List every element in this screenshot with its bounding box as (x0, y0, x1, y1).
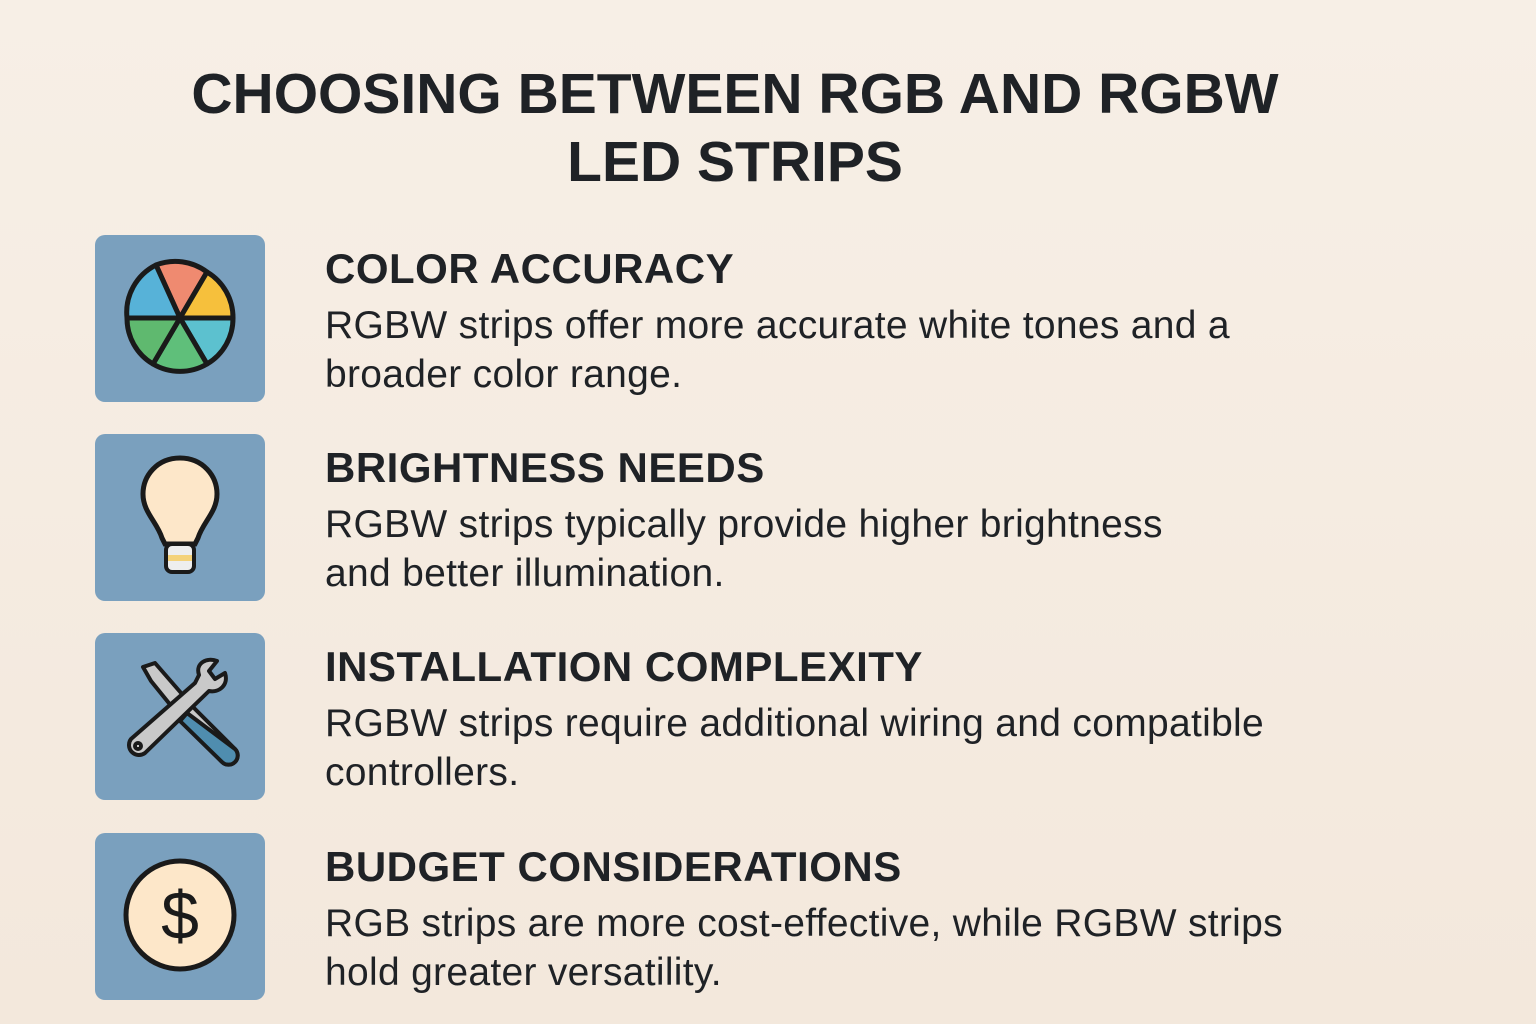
text (325, 304, 1230, 396)
icon: tools (95, 633, 265, 800)
text: RGBW strips offer more accurate white tones and a (325, 304, 1230, 347)
heading: COLOR ACCURACY (325, 245, 734, 292)
text (325, 503, 1163, 595)
heading: BUDGET CONSIDERATIONS (325, 843, 902, 890)
text: RGBW strips require additional wiring and compatible (325, 702, 1264, 745)
icon: light bulb (95, 434, 265, 601)
text (325, 702, 1264, 794)
panel: installation (95, 633, 1264, 800)
panel: color accuracy (95, 235, 1230, 402)
text: and better illumination. (325, 552, 725, 595)
title: LED STRIPS (567, 130, 903, 194)
icon: dollar coin (95, 833, 265, 1000)
text (325, 902, 1283, 994)
panel: brightness (95, 434, 1163, 601)
title: CHOOSING BETWEEN RGB AND RGBW (191, 62, 1279, 126)
heading: BRIGHTNESS NEEDS (325, 444, 765, 491)
heading: INSTALLATION COMPLEXITY (325, 643, 923, 690)
icon: dollar coin: $ (161, 878, 199, 954)
text: controllers. (325, 751, 519, 794)
panel: budget (95, 833, 1283, 1000)
text: RGB strips are more cost-effective, while RGBW strips (325, 902, 1283, 945)
text: RGBW strips typically provide higher brightness (325, 503, 1163, 546)
icon: color wheel (95, 235, 265, 402)
text: broader color range. (325, 353, 682, 396)
text: hold greater versatility. (325, 951, 722, 994)
title (191, 62, 1279, 194)
